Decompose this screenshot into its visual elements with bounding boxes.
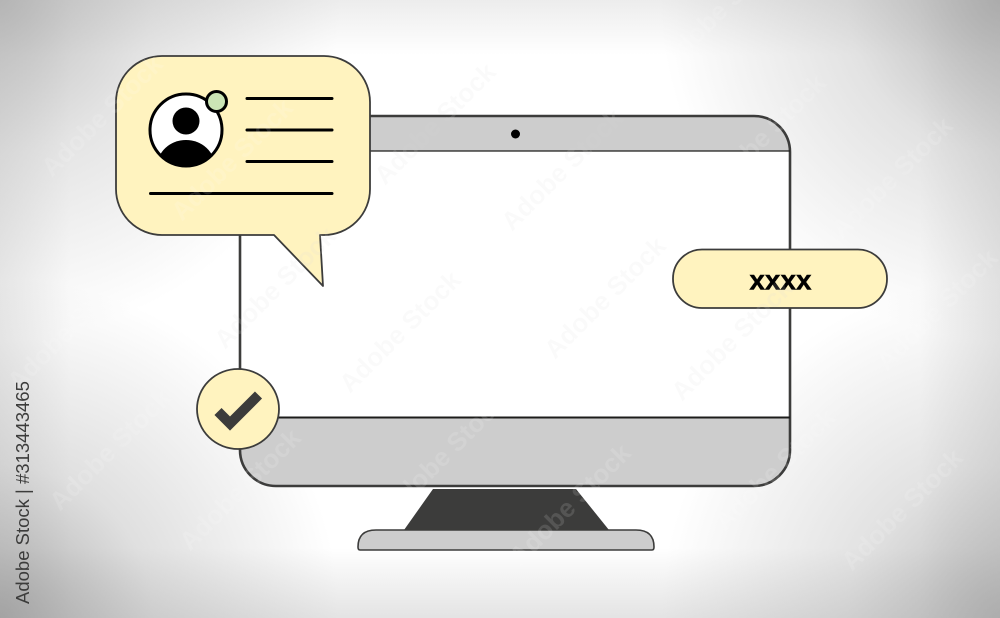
monitor bbox=[240, 116, 790, 550]
watermark pattern: Adobe Stock bbox=[835, 442, 969, 576]
watermark pattern: Adobe Stock bbox=[165, 92, 299, 226]
icon: user avatar bbox=[148, 92, 224, 168]
watermark shading: Adobe Stock bbox=[665, 272, 799, 406]
monitor stand neck bbox=[404, 489, 609, 530]
watermark pattern: Adobe Stock bbox=[698, 67, 832, 201]
watermark pattern: Adobe Stock bbox=[368, 56, 502, 190]
watermark pattern: Adobe Stock bbox=[870, 242, 1000, 376]
watermark pattern: Adobe Stock bbox=[35, 48, 169, 182]
watermark pattern: Adobe Stock bbox=[825, 110, 959, 244]
monitor top bezel bbox=[240, 116, 790, 151]
icon: status dot bbox=[206, 92, 226, 112]
monitor screen bbox=[240, 151, 790, 418]
badge text: xxxx bbox=[749, 264, 812, 296]
watermark shading bbox=[208, 56, 799, 406]
watermark shading: Adobe Stock bbox=[495, 102, 629, 236]
watermark pattern: Adobe Stock bbox=[208, 220, 342, 354]
watermark shading: Adobe Stock bbox=[208, 220, 342, 354]
watermark pattern: Adobe Stock bbox=[43, 382, 177, 516]
speech bubble bbox=[116, 56, 370, 286]
badge: password field bbox=[673, 250, 887, 308]
bubble shape bbox=[116, 56, 370, 286]
watermark pattern: Adobe Stock bbox=[333, 264, 467, 398]
watermark pattern: Adobe Stock bbox=[665, 272, 799, 406]
text placeholder lines bbox=[150, 98, 332, 194]
watermark pattern: Adobe Stock bbox=[538, 230, 672, 364]
watermark shading: Adobe Stock bbox=[368, 56, 502, 190]
icon: camera dot bbox=[511, 130, 520, 138]
watermark pattern: Adobe Stock bbox=[708, 402, 842, 536]
icon: check badge bbox=[197, 369, 279, 449]
watermark pattern: Adobe Stock bbox=[378, 386, 512, 520]
watermark pattern: Adobe Stock bbox=[503, 437, 637, 571]
monitor outline bbox=[240, 116, 790, 486]
monitor stand base bbox=[358, 530, 654, 550]
monitor bottom bezel bbox=[240, 418, 790, 486]
watermark pattern: Adobe Stock bbox=[495, 102, 629, 236]
watermark shading: Adobe Stock bbox=[333, 264, 467, 398]
watermark pattern: Adobe Stock bbox=[173, 422, 307, 556]
stock credit: Adobe Stock | #313443465 bbox=[12, 381, 33, 604]
watermark pattern: Adobe Stock bbox=[1, 262, 135, 396]
watermark shading: Adobe Stock bbox=[538, 230, 672, 364]
